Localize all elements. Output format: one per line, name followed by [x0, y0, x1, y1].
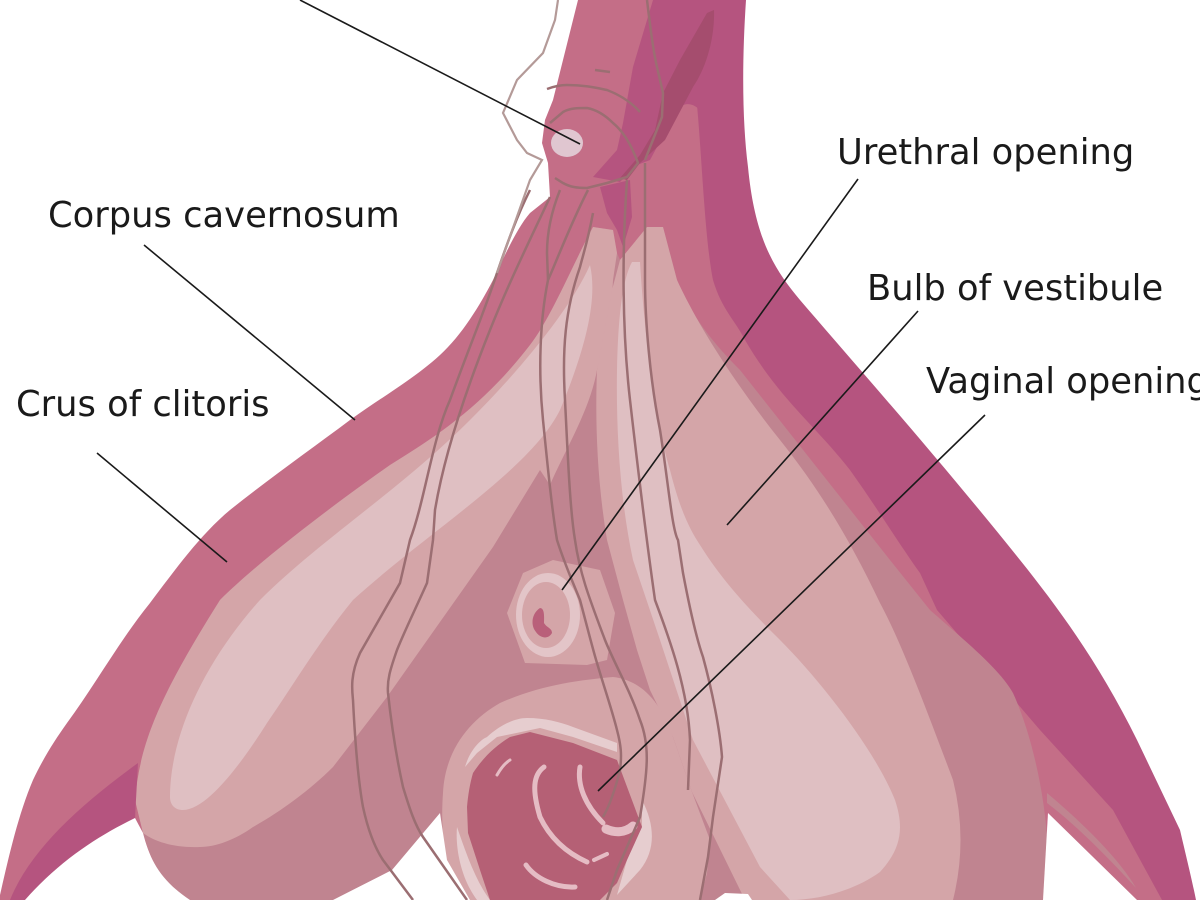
leader line: vaginal opening: [598, 415, 985, 791]
white gap below left tail: [25, 818, 190, 900]
clitoral glans highlight: [551, 129, 583, 157]
nerve and glans outlines: [352, 0, 722, 900]
left bulb lighter rose: [135, 227, 617, 847]
white gap below centre: [333, 813, 470, 900]
vaginal opening lower light crescent: [457, 827, 490, 900]
vaginal opening outer surround: [442, 677, 710, 900]
lower left dark tail: [10, 763, 138, 900]
vaginal opening upper light crescent: [465, 718, 617, 767]
leader line: crus: [97, 453, 227, 562]
label: Urethral opening: Urethral opening: [837, 132, 1134, 173]
small white gap lower right: [715, 893, 752, 900]
urethral opening centre: [533, 608, 552, 637]
left bulb highlight: [170, 265, 592, 810]
prepuce outline: [497, 0, 558, 273]
leader line: bulb of vestibule: [727, 311, 918, 525]
right bulb highlight: [617, 262, 900, 900]
urethral opening middle ring: [516, 573, 580, 657]
bulbs mid layer: greyish rose: [135, 227, 1048, 900]
label: Crus of clitoris: Crus of clitoris: [16, 384, 270, 425]
vaginal opening dark interior: [467, 732, 642, 900]
vaginal folds: [497, 760, 633, 887]
right tail light strip: [1047, 793, 1136, 888]
central magenta wedge: [600, 180, 632, 247]
right outer crus: dark magenta: [640, 0, 1196, 900]
white gap below right tail: [1043, 813, 1137, 900]
leader line: corpus cavernosum: [144, 245, 355, 420]
urethral opening outer ring: [507, 560, 615, 665]
label: Bulb of vestibule: Bulb of vestibule: [867, 268, 1163, 309]
right bulb lighter rose: [596, 227, 960, 900]
urethral opening inner ring: [522, 582, 570, 648]
shaft dark stripe: [620, 10, 714, 180]
vaginal opening right light crescent: [617, 800, 652, 895]
leader line: glans: [300, 0, 580, 144]
leader line: urethral opening: [562, 179, 858, 590]
shaft dark side: [593, 0, 740, 182]
label: Corpus cavernosum: Corpus cavernosum: [48, 195, 400, 236]
